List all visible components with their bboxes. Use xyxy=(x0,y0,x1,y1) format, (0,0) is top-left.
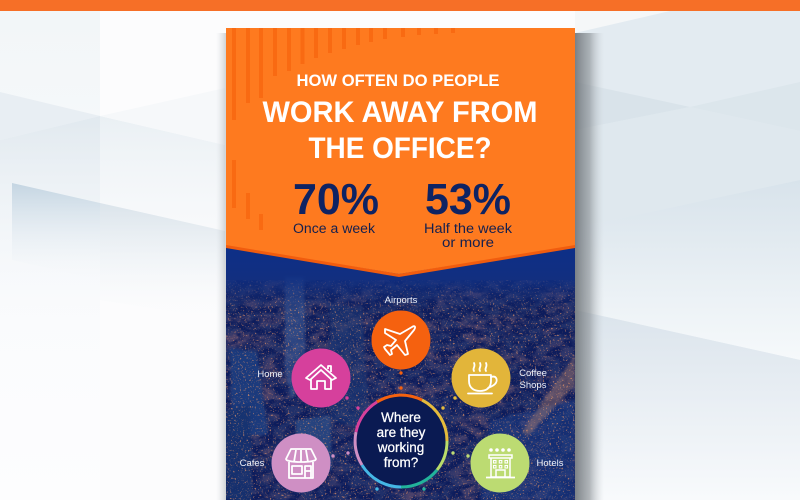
node: hotels xyxy=(470,434,564,492)
center hub: where are they working from: working xyxy=(377,440,424,455)
stat: 70% once a week: Once a week xyxy=(293,221,375,236)
top orange bar xyxy=(0,0,800,11)
node: cafes: Cafes xyxy=(240,458,265,469)
title: WORK AWAY FROM xyxy=(262,96,538,129)
poster xyxy=(226,28,575,500)
stat: 70% once a week xyxy=(294,184,378,233)
stat: 53% half the week or more: or more xyxy=(442,235,494,250)
node: coffee shops: Coffee xyxy=(519,368,547,379)
title: THE OFFICE? xyxy=(308,132,492,165)
center hub: where are they working from xyxy=(354,394,448,488)
stat: 53% half the week or more: Half the week xyxy=(424,221,512,236)
stat: 53% half the week or more xyxy=(425,184,512,247)
poster shadow xyxy=(216,33,604,500)
node: home: Home xyxy=(257,369,283,380)
node: coffee shops: Shops xyxy=(520,380,547,391)
city photo background xyxy=(226,240,575,500)
center hub: where are they working from: from? xyxy=(384,455,418,470)
node: cafes xyxy=(240,434,330,492)
connector dots xyxy=(331,371,470,491)
orange header banner xyxy=(226,28,575,277)
center hub: where are they working from: are they xyxy=(377,425,426,440)
title xyxy=(262,74,536,158)
node: home xyxy=(257,348,350,408)
node: coffee shops xyxy=(452,348,547,408)
node: airports: Airports xyxy=(385,295,418,306)
decorative stripes xyxy=(232,28,455,230)
title: HOW OFTEN DO PEOPLE xyxy=(296,71,500,90)
stat: 53% half the week or more: 53% xyxy=(425,175,511,224)
node: airports xyxy=(372,295,430,370)
center hub: where are they working from: Where xyxy=(381,410,421,425)
node: hotels: Hotels xyxy=(537,458,564,469)
stat: 70% once a week: 70% xyxy=(293,175,379,224)
